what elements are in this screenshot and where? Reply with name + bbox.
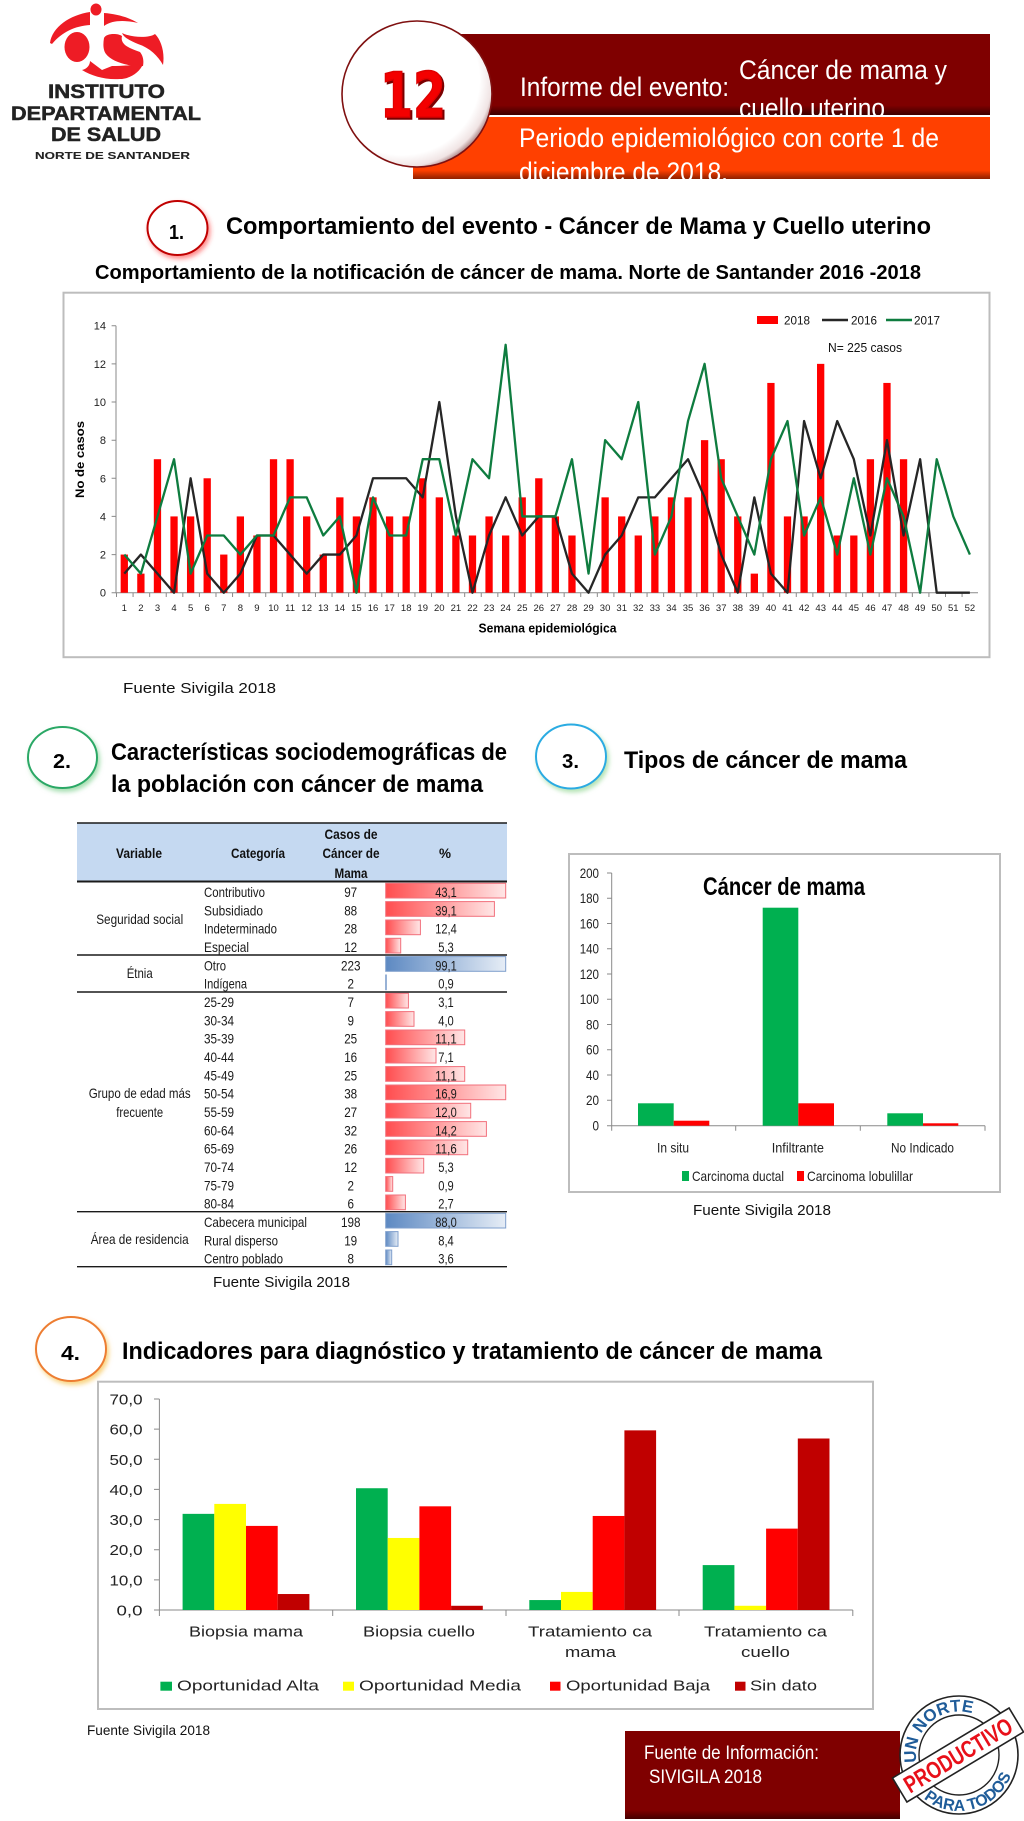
x axis labels: 6 <box>205 603 210 614</box>
category column: 25-29 <box>204 994 234 1010</box>
stamp curved text: PARA TODOS <box>924 1772 1010 1811</box>
x axis labels: 4 <box>171 603 177 614</box>
line 2017 <box>124 345 970 593</box>
banner: event name <box>461 34 990 115</box>
number badge 3: 3. <box>562 751 579 773</box>
percent column: 39,1 <box>435 902 457 918</box>
y axis labels: 12 <box>94 359 106 371</box>
cases column: 88 <box>344 902 357 918</box>
cases column: 16 <box>344 1049 357 1065</box>
x axis labels: 30 <box>600 603 610 614</box>
variable column <box>89 911 191 1247</box>
table header: Categoría <box>231 846 285 861</box>
axes <box>154 1399 853 1616</box>
percent column: 5,3 <box>438 1159 454 1175</box>
category labels: cuello <box>741 1644 790 1661</box>
section 1 title: Comportamiento del evento - Cáncer de Mama y Cuello uterino <box>226 213 931 240</box>
bars: green <box>183 1488 734 1610</box>
category column: Cabecera municipal <box>204 1214 307 1230</box>
cases column: 12 <box>344 1159 357 1175</box>
x axis labels: 10 <box>268 603 279 614</box>
x axis labels: 40 <box>766 603 776 614</box>
x axis labels: 45 <box>849 603 859 614</box>
logo text: NORTE DE SANTANDER <box>35 150 191 162</box>
legend: Oportunidad Media <box>359 1678 522 1695</box>
x axis labels: 49 <box>915 603 925 614</box>
y axis labels: 40,0 <box>110 1482 142 1499</box>
panel: diagnosis and treatment indicators chart <box>98 1382 873 1709</box>
cases column: 32 <box>344 1122 357 1138</box>
percent column: 7,1 <box>438 1049 454 1065</box>
cases column: 223 <box>341 957 361 973</box>
x axis labels: 42 <box>799 603 809 614</box>
y axis labels: 0 <box>100 588 106 600</box>
x axis labels: 1 <box>122 603 127 614</box>
cases column: 26 <box>344 1141 357 1157</box>
y axis labels: 80 <box>586 1016 599 1032</box>
footer box: information source: Fuente de Información: <box>644 1743 819 1764</box>
variable column: Grupo de edad más <box>89 1085 191 1101</box>
footer box: information source: SIVIGILA 2018 <box>649 1767 762 1788</box>
y axis labels: 10,0 <box>110 1572 142 1589</box>
section 2 heading <box>28 727 507 798</box>
cases column: 28 <box>344 921 357 937</box>
percent column: 2,7 <box>438 1196 454 1212</box>
category labels: No Indicado <box>891 1140 954 1156</box>
section 3 heading <box>536 724 908 788</box>
x axis labels: 33 <box>650 603 660 614</box>
category labels: Tratamiento ca <box>704 1624 828 1641</box>
number badge 4 <box>36 1317 106 1381</box>
banner: period: Periodo epidemiológico con corte 1 de <box>519 123 939 153</box>
legend: Oportunidad Baja <box>566 1678 711 1695</box>
section 2 title: la población con cáncer de mama <box>111 771 484 798</box>
percent column: 11,1 <box>435 1067 457 1083</box>
badge: number 12: 12 <box>380 59 446 132</box>
number badge 1 <box>148 201 208 255</box>
number badge 4: 4. <box>61 1343 80 1365</box>
axes <box>607 873 985 1131</box>
category column: Centro poblado <box>204 1251 283 1267</box>
y axis labels: 8 <box>100 435 106 447</box>
x axis labels: 11 <box>285 603 295 614</box>
percent column: 14,2 <box>435 1122 457 1138</box>
banner: event name: cuello uterino <box>739 93 885 123</box>
x axis labels <box>122 603 975 614</box>
banner: period: diciembre de 2018. <box>519 157 728 187</box>
header banner <box>342 21 990 187</box>
category column: 45-49 <box>204 1067 234 1083</box>
x axis labels: 31 <box>616 603 627 614</box>
logo text: DEPARTAMENTAL <box>11 104 201 125</box>
percent column: 12,0 <box>435 1104 457 1120</box>
x axis labels: 28 <box>567 603 577 614</box>
y axis labels <box>580 865 599 1134</box>
category column: Rural disperso <box>204 1232 278 1248</box>
category column: 50-54 <box>204 1086 234 1102</box>
cases column: 12 <box>344 939 357 955</box>
y axis labels <box>94 321 106 600</box>
panel: weekly notification chart <box>64 293 990 657</box>
banner: event name: Cáncer de mama y <box>739 55 947 85</box>
percent column: 43,1 <box>435 884 457 900</box>
cases column: 6 <box>347 1196 354 1212</box>
legend: Carcinoma ductal <box>692 1168 784 1184</box>
x axis labels: 2 <box>138 603 144 614</box>
percent column: 3,6 <box>438 1251 454 1267</box>
cases column: 25 <box>344 1031 357 1047</box>
category labels: Biopsia cuello <box>363 1624 475 1641</box>
legend: 2018 <box>784 316 810 328</box>
x axis labels: 26 <box>534 603 544 614</box>
x axis labels: 44 <box>832 603 842 614</box>
bars: red <box>246 1506 798 1610</box>
y axis labels: 40 <box>586 1067 599 1083</box>
x axis labels: 38 <box>733 603 743 614</box>
bars <box>638 908 958 1126</box>
banner: period <box>413 117 990 179</box>
banner: event name: Informe del evento: <box>520 72 729 102</box>
x axis labels: 47 <box>882 603 892 614</box>
percent column: 0,9 <box>438 976 454 992</box>
stamp curved text <box>904 1700 1010 1811</box>
category column: 65-69 <box>204 1141 234 1157</box>
y axis labels: 100 <box>580 991 599 1007</box>
source note 1: Fuente Sivigila 2018 <box>123 680 276 697</box>
category labels: Biopsia mama <box>189 1624 304 1641</box>
y axis labels: 70,0 <box>110 1392 142 1408</box>
percent column <box>435 884 457 1267</box>
cases column: 9 <box>347 1012 354 1028</box>
cases column: 25 <box>344 1067 357 1083</box>
category column: Subsidiado <box>204 902 263 918</box>
x axis labels: 14 <box>335 603 345 614</box>
bars: yellow <box>214 1504 766 1610</box>
category labels: Infiltrante <box>772 1140 824 1156</box>
category column: 80-84 <box>204 1196 234 1212</box>
x axis labels: 34 <box>666 603 677 614</box>
cases column: 2 <box>347 976 354 992</box>
percent column: 16,9 <box>435 1086 457 1102</box>
legend: 2017 <box>914 316 940 328</box>
category column: Especial <box>204 939 249 955</box>
x axis labels: 52 <box>965 603 975 614</box>
category column: 55-59 <box>204 1104 234 1120</box>
table header: Casos de <box>324 827 378 842</box>
case count note: N= 225 casos <box>828 340 902 355</box>
legend: Sin dato <box>750 1678 817 1695</box>
category column: Contributivo <box>204 884 265 900</box>
x axis labels: 9 <box>254 603 260 614</box>
panel: breast cancer types chart <box>569 854 1000 1192</box>
category labels <box>189 1624 828 1661</box>
legend <box>682 1168 913 1184</box>
table header: Mama <box>334 866 368 881</box>
category column: Indeterminado <box>204 921 277 937</box>
badge: number 12 <box>342 21 492 167</box>
percentage data bars <box>386 883 506 1265</box>
number badge 1: 1. <box>169 222 184 244</box>
x axis labels: 17 <box>384 603 395 614</box>
category column: 70-74 <box>204 1159 234 1175</box>
cases column: 198 <box>341 1214 361 1230</box>
bars 2018 <box>121 364 907 593</box>
source note 2: Fuente Sivigila 2018 <box>213 1274 350 1291</box>
number badge 3 <box>536 724 606 788</box>
percent column: 3,1 <box>438 994 454 1010</box>
x axis labels: 18 <box>401 603 411 614</box>
x axis labels: 51 <box>948 603 959 614</box>
x axis labels: 21 <box>451 603 461 614</box>
y axis labels: 60 <box>586 1042 599 1058</box>
percent column: 12,4 <box>435 921 457 937</box>
footer box: information source <box>625 1731 900 1819</box>
section 3 title: Tipos de cáncer de mama <box>624 747 908 774</box>
percent column: 11,1 <box>435 1031 457 1047</box>
percent column: 5,3 <box>438 939 454 955</box>
x axis title: Semana epidemiológica <box>478 622 618 636</box>
x axis labels: 27 <box>550 603 561 614</box>
y axis title: No de casos <box>73 421 87 498</box>
logo: Instituto Departamental de Salud <box>11 4 201 162</box>
logo text: DE SALUD <box>51 125 161 146</box>
x axis labels: 19 <box>417 603 428 614</box>
x axis labels: 46 <box>865 603 876 614</box>
x axis labels: 48 <box>898 603 909 614</box>
x axis labels: 50 <box>931 603 942 614</box>
y axis labels: 30,0 <box>110 1512 142 1529</box>
section 2 title: Características sociodemográficas de <box>111 739 507 766</box>
stamp ring <box>900 1696 1018 1814</box>
x axis labels: 12 <box>301 603 312 614</box>
section 4 heading <box>36 1317 823 1381</box>
category column: Indígena <box>204 976 247 992</box>
y axis labels: 6 <box>100 473 106 485</box>
source note 4: Fuente Sivigila 2018 <box>87 1722 210 1738</box>
y axis labels: 2 <box>100 550 106 562</box>
x axis labels: 22 <box>467 603 478 614</box>
x axis labels: 32 <box>633 603 644 614</box>
y axis labels: 140 <box>580 941 599 957</box>
category labels: mama <box>565 1644 617 1661</box>
variable column: Seguridad social <box>96 911 183 927</box>
section 2 title <box>111 739 507 798</box>
percent column: 0,9 <box>438 1177 454 1193</box>
cases column: 38 <box>344 1086 357 1102</box>
percent column: 4,0 <box>438 1012 454 1028</box>
x axis labels: 36 <box>699 603 710 614</box>
source note 3: Fuente Sivigila 2018 <box>693 1202 831 1219</box>
stamp curved text: UN NORTE <box>904 1700 974 1762</box>
badge: number 12: 12 <box>382 61 448 134</box>
y axis labels: 120 <box>580 966 599 982</box>
cases column: 2 <box>347 1177 354 1193</box>
category column: 40-44 <box>204 1049 234 1065</box>
x axis labels: 37 <box>716 603 726 614</box>
logo text: INSTITUTO <box>48 82 165 103</box>
variable column: Área de residencia <box>91 1231 189 1247</box>
number badge 2 <box>28 727 97 788</box>
y axis labels: 14 <box>94 321 106 333</box>
x axis labels: 5 <box>188 603 193 614</box>
category column: 60-64 <box>204 1122 234 1138</box>
x axis labels: 39 <box>749 603 760 614</box>
table header: % <box>439 846 451 861</box>
x axis labels: 16 <box>368 603 378 614</box>
stamp: Un norte productivo para todos <box>892 1695 1024 1815</box>
variable column: frecuente <box>116 1104 163 1120</box>
x axis labels: 35 <box>683 603 693 614</box>
y axis labels: 180 <box>580 890 599 906</box>
legend: 2016 <box>851 316 877 328</box>
table header: Cáncer de <box>322 846 380 861</box>
category column <box>204 884 307 1267</box>
logo text <box>11 82 201 162</box>
x axis labels: 20 <box>434 603 445 614</box>
y axis labels: 50,0 <box>110 1452 142 1469</box>
variable column: Étnia <box>127 965 153 981</box>
category labels: Tratamiento ca <box>528 1624 653 1641</box>
y axis labels: 160 <box>580 916 599 932</box>
line 2016 <box>124 402 970 593</box>
y axis labels: 0 <box>592 1118 599 1134</box>
table header <box>77 823 507 881</box>
section 4 title: Indicadores para diagnóstico y tratamiento de cáncer de mama <box>122 1338 823 1365</box>
chart title: Cáncer de mama <box>703 873 866 901</box>
table: sociodemographic characteristics <box>77 823 507 1267</box>
x axis labels: 29 <box>583 603 594 614</box>
cases column: 7 <box>347 994 354 1010</box>
cases column: 27 <box>344 1104 357 1120</box>
x axis labels: 23 <box>484 603 494 614</box>
category labels <box>657 1140 954 1156</box>
x axis labels: 25 <box>517 603 527 614</box>
y axis labels: 200 <box>580 865 599 881</box>
y axis labels: 60,0 <box>110 1422 142 1439</box>
x axis labels: 15 <box>351 603 362 614</box>
x axis labels: 41 <box>782 603 793 614</box>
x axis labels: 13 <box>318 603 329 614</box>
cases column: 19 <box>344 1232 357 1248</box>
percent column: 8,4 <box>438 1232 454 1248</box>
table header: Variable <box>116 846 162 861</box>
percent column: 11,6 <box>435 1141 457 1157</box>
cases column: 8 <box>347 1251 354 1267</box>
category column: Otro <box>204 957 226 973</box>
percent column: 99,1 <box>435 957 457 973</box>
x axis labels: 24 <box>500 603 511 614</box>
y axis labels: 10 <box>94 397 106 409</box>
y axis labels <box>110 1392 142 1620</box>
x axis labels: 43 <box>815 603 826 614</box>
percent column: 88,0 <box>435 1214 457 1230</box>
legend <box>160 1678 817 1695</box>
legend: Carcinoma lobulillar <box>807 1168 913 1184</box>
cases column <box>341 884 361 1267</box>
bars: dark red <box>278 1430 830 1610</box>
cases column: 97 <box>344 884 357 900</box>
category column: 35-39 <box>204 1031 234 1047</box>
axes <box>112 326 978 595</box>
category labels: In situ <box>657 1140 689 1156</box>
legend <box>757 316 940 328</box>
chart 1 subtitle: Comportamiento de la notificación de cáncer de mama. Norte de Santander 2016 -2018 <box>95 262 921 284</box>
y axis labels: 4 <box>100 511 106 523</box>
section 1 heading <box>148 201 931 255</box>
logo mark <box>50 4 164 79</box>
x axis labels: 3 <box>155 603 160 614</box>
category column: 30-34 <box>204 1012 234 1028</box>
number badge 2: 2. <box>53 751 71 773</box>
x axis labels: 8 <box>238 603 243 614</box>
legend: Oportunidad Alta <box>177 1678 320 1695</box>
y axis labels: 0,0 <box>116 1602 142 1620</box>
y axis labels: 20,0 <box>110 1542 142 1559</box>
x axis labels: 7 <box>221 603 226 614</box>
y axis labels: 20 <box>586 1092 599 1108</box>
category column: 75-79 <box>204 1177 234 1193</box>
